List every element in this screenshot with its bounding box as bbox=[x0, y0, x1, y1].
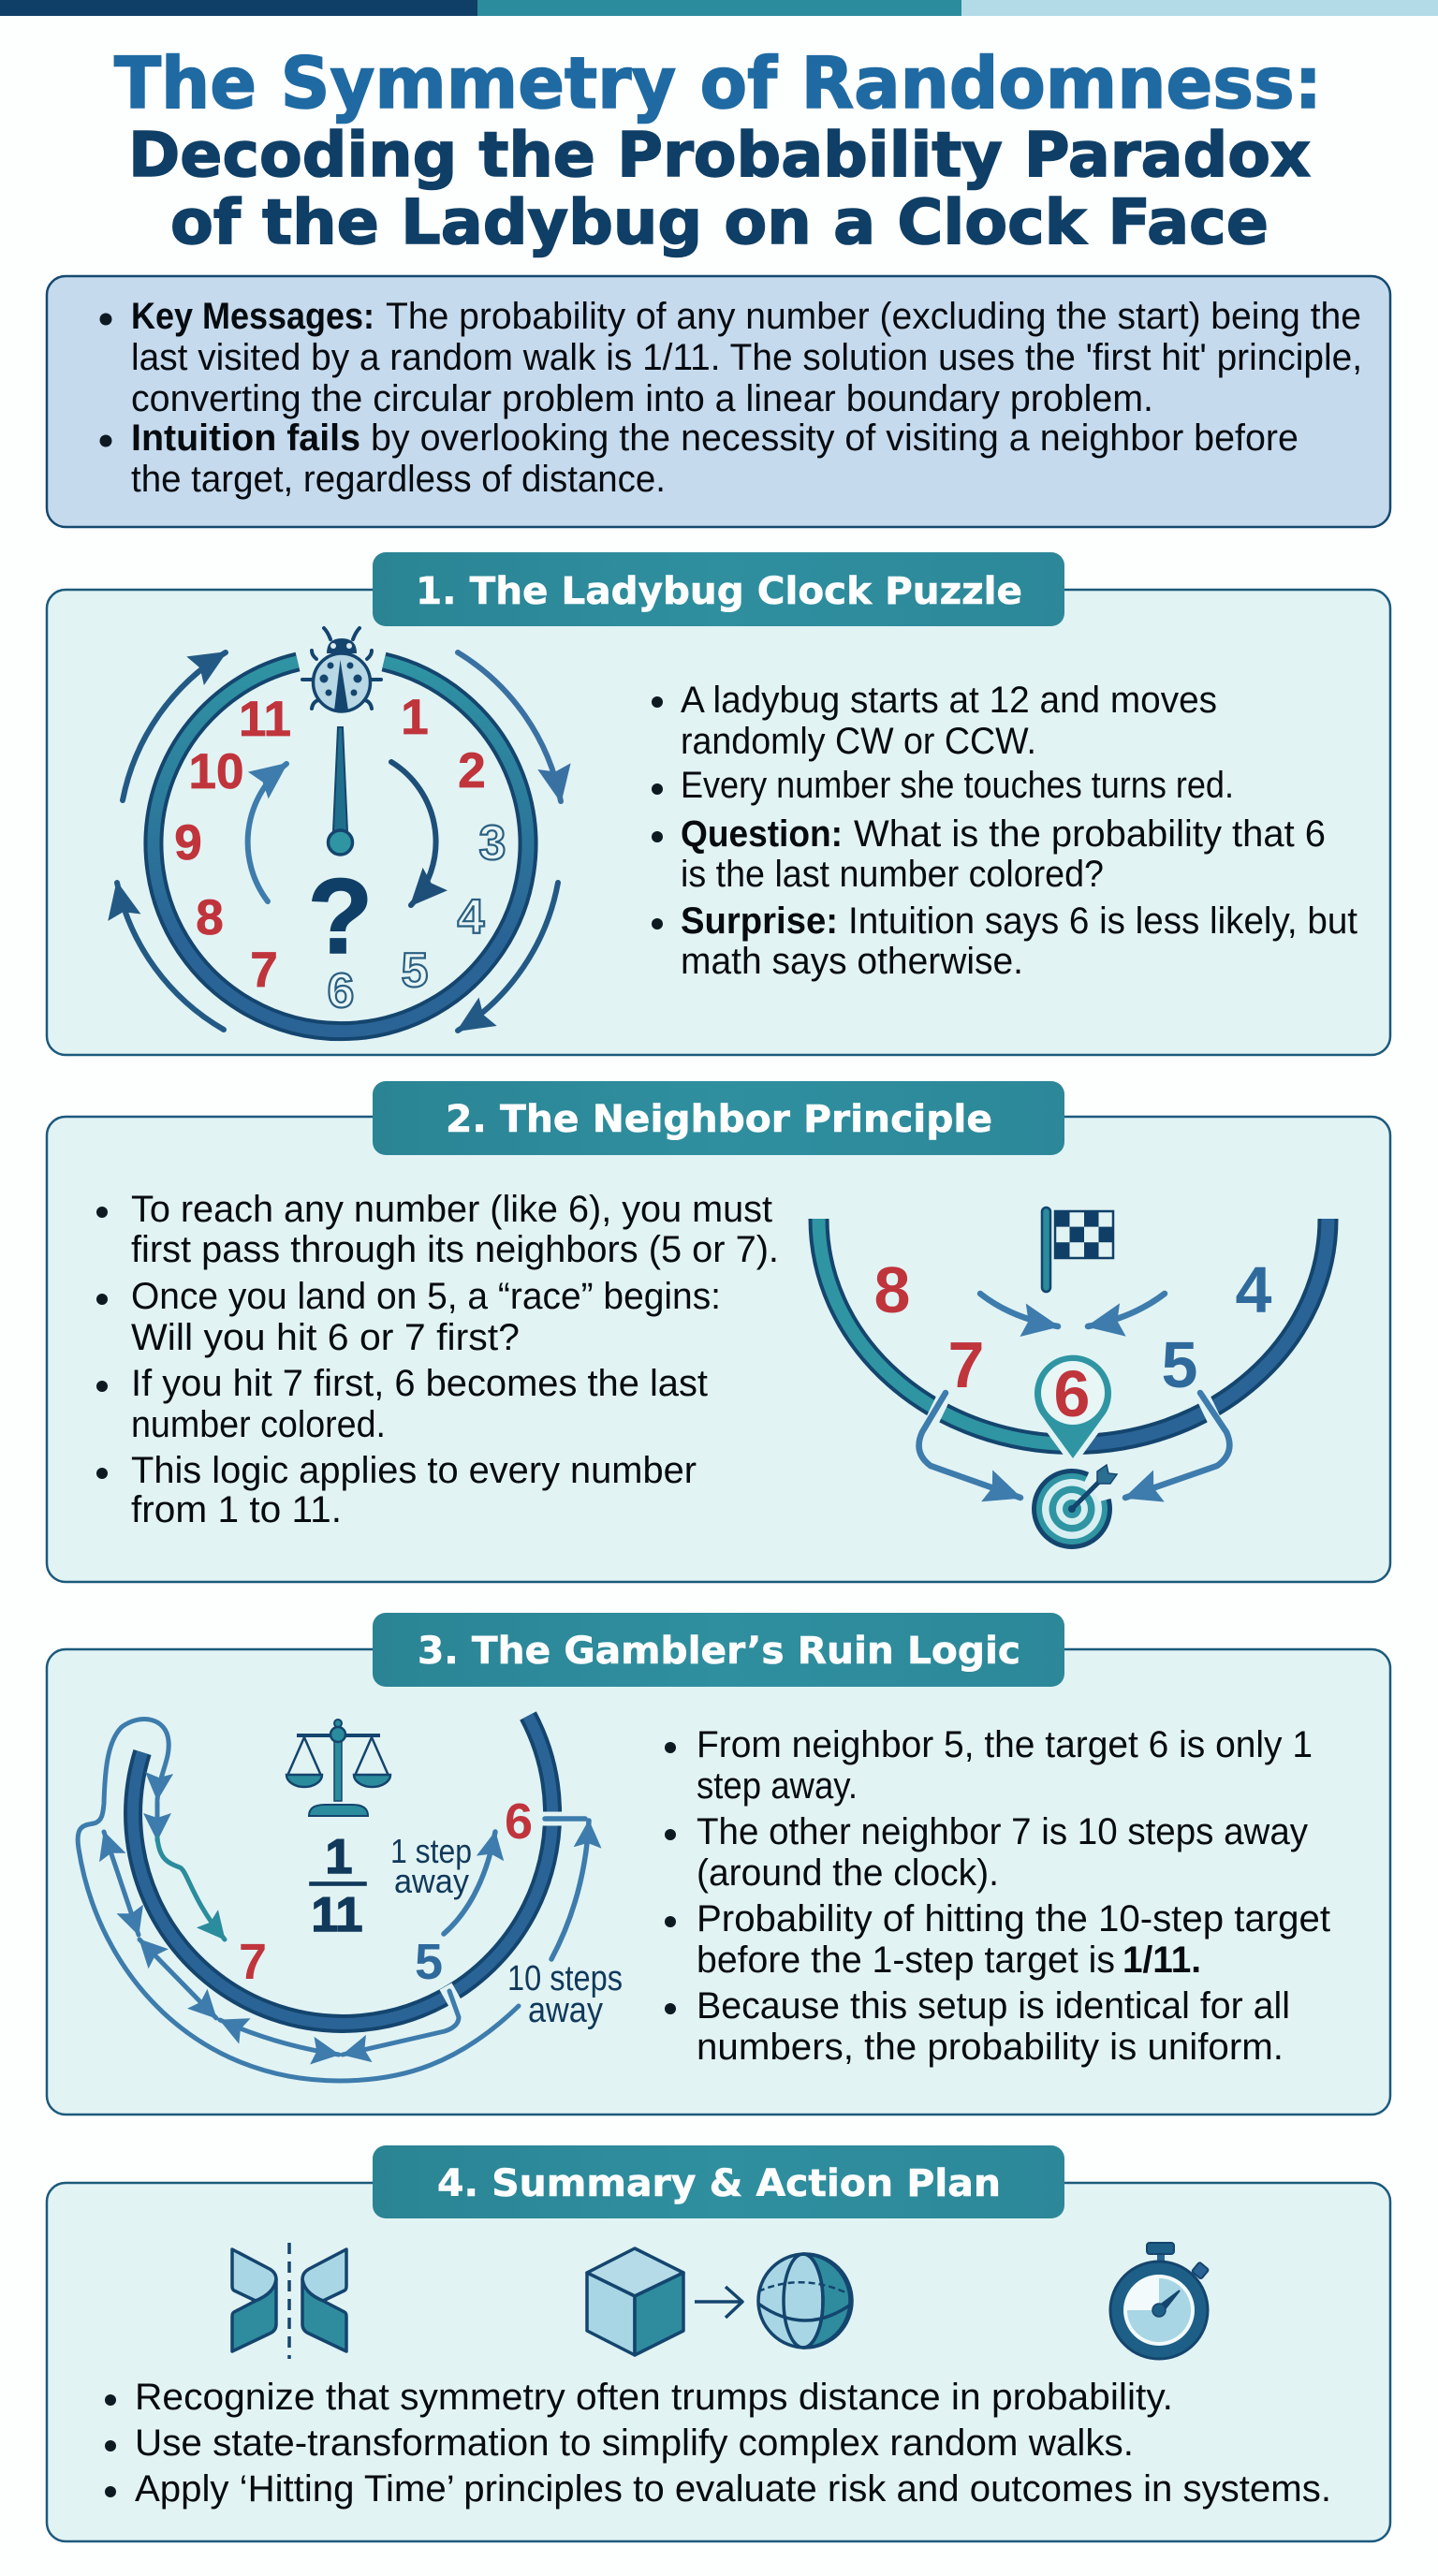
icon: cube to sphere bbox=[587, 2248, 852, 2355]
text block: section 3 bullets: Because this setup is identical for all bbox=[697, 1985, 1290, 2027]
text block: section 1 bullets bbox=[652, 680, 1357, 982]
heading: section 1 bbox=[373, 552, 1064, 626]
top colour bar bbox=[0, 0, 1438, 16]
fraction 1/11: 1 bbox=[326, 1830, 352, 1884]
numbers 8 4 7 5: 7 bbox=[948, 1328, 984, 1401]
panel: key messages bbox=[47, 276, 1390, 527]
red visited numbers: 8 bbox=[196, 890, 224, 945]
heading: section 3: 3. The Gambler’s Ruin Logic bbox=[418, 1630, 1020, 1673]
text block: section 1 bullets: A ladybug starts at 12 and moves bbox=[681, 680, 1217, 721]
text block: section 2 bullets bbox=[96, 1189, 779, 1530]
heading: section 4 bbox=[373, 2145, 1064, 2218]
panel: section 4 background bbox=[47, 2183, 1390, 2541]
connector arrows to target bbox=[919, 1294, 1229, 1498]
location pin with 6 bbox=[1034, 1355, 1111, 1458]
numbers 8 4 7 5 bbox=[874, 1253, 1272, 1401]
fraction 1/11: 11 bbox=[312, 1888, 362, 1942]
text block: section 4 bullets: Recognize that symmetry often trumps distance in probability. bbox=[135, 2377, 1173, 2418]
winding random walk arrows bbox=[78, 1720, 519, 2081]
text block: section 3 bullets: before the 1-step target is bbox=[697, 1939, 1115, 1981]
label: 10 steps away bbox=[507, 1959, 623, 2030]
text block: section 2 bullets: Will you hit 6 or 7 first? bbox=[131, 1317, 520, 1358]
heading: section 2: 2. The Neighbor Principle bbox=[446, 1098, 992, 1141]
text block: section 1 bullets: math says otherwise. bbox=[681, 941, 1023, 982]
panel: key messages: the target, regardless of distance. bbox=[131, 459, 666, 500]
red visited numbers: 10 bbox=[189, 744, 243, 799]
numbers 8 4 7 5: 5 bbox=[1162, 1328, 1197, 1401]
heading: section 3 bbox=[373, 1613, 1064, 1687]
text block: section 2 bullets: first pass through its neighbors (5 or 7). bbox=[131, 1229, 779, 1270]
arc bbox=[818, 1219, 1328, 1444]
label: 1 step away bbox=[390, 1832, 472, 1900]
distance arrows bbox=[444, 1819, 589, 1959]
numbers 8 4 7 5: 8 bbox=[874, 1253, 910, 1326]
icon: target with dart bbox=[1032, 1465, 1117, 1549]
text block: section 1 bullets: Every number she touches turns red. bbox=[681, 765, 1234, 806]
icon: balance scale bbox=[286, 1720, 390, 1816]
label: 10 steps away: 10 steps bbox=[507, 1959, 623, 1998]
panel: key messages: The probability of any number (excluding the start) being the bbox=[386, 296, 1361, 337]
text block: section 3 bullets: 1/11. bbox=[1123, 1939, 1201, 1981]
heading: section 2 bbox=[373, 1081, 1064, 1155]
text block: section 3 bullets: Probability of hitting the 10-step target bbox=[697, 1898, 1330, 1939]
panel: section 2 background bbox=[47, 1117, 1390, 1582]
icon: mirror symmetry bbox=[232, 2243, 346, 2359]
outlined unvisited numbers: 3 bbox=[479, 816, 506, 871]
gambler's ruin diagram bbox=[78, 1716, 623, 2081]
question mark: ? bbox=[308, 857, 373, 976]
numbers 7 6 5: 6 bbox=[505, 1793, 533, 1850]
text block: section 1 bullets: Intuition says 6 is less likely, but bbox=[848, 900, 1357, 942]
inner arrows bbox=[248, 762, 436, 905]
location pin with 6: 6 bbox=[1054, 1357, 1090, 1430]
text block: section 1 bullets: What is the probability that 6 bbox=[854, 813, 1326, 855]
red visited numbers: 11 bbox=[239, 692, 291, 747]
red visited numbers bbox=[174, 690, 486, 998]
text block: section 3 bullets: From neighbor 5, the target 6 is only 1 bbox=[697, 1724, 1313, 1765]
outlined unvisited numbers bbox=[328, 816, 506, 1018]
panel: key messages: Key Messages: bbox=[131, 296, 374, 337]
panel: key messages: Intuition fails bbox=[131, 417, 360, 459]
text block: section 4 bullets bbox=[105, 2377, 1331, 2510]
label: 10 steps away: away bbox=[528, 1991, 603, 2030]
text block: section 3 bullets bbox=[665, 1724, 1330, 2068]
title: of the Ladybug on a Clock Face bbox=[170, 186, 1269, 258]
heading: section 4: 4. Summary & Action Plan bbox=[437, 2162, 1001, 2205]
text block: section 3 bullets: numbers, the probability is uniform. bbox=[697, 2027, 1284, 2068]
fraction 1/11 bbox=[310, 1830, 366, 1942]
red visited numbers: 1 bbox=[401, 690, 429, 745]
panel: key messages: by overlooking the necessity of visiting a neighbor before bbox=[371, 417, 1299, 459]
text block: section 1 bullets: randomly CW or CCW. bbox=[681, 721, 1036, 762]
clock hand bbox=[328, 727, 352, 855]
red visited numbers: 9 bbox=[174, 815, 202, 871]
panel: section 3 background bbox=[47, 1649, 1390, 2115]
numbers 7 6 5: 7 bbox=[239, 1934, 267, 1990]
text block: section 2 bullets: Once you land on 5, a “race” begins: bbox=[131, 1276, 721, 1317]
numbers 7 6 5 bbox=[239, 1793, 533, 1990]
outer arrows bbox=[117, 652, 561, 1031]
text block: section 2 bullets: number colored. bbox=[131, 1404, 386, 1445]
arc bbox=[133, 1716, 565, 2024]
label: 1 step away: 1 step bbox=[390, 1832, 472, 1870]
panel: section 1 background bbox=[47, 590, 1390, 1055]
panel: key messages: converting the circular problem into a linear boundary problem. bbox=[131, 378, 1153, 419]
text block: section 2 bullets: from 1 to 11. bbox=[131, 1489, 342, 1530]
text block: section 4 bullets: Use state-transformation to simplify complex random walks. bbox=[135, 2422, 1134, 2464]
panel: key messages: last visited by a random walk is 1/11. The solution uses the 'first hit' principle, bbox=[131, 337, 1362, 378]
label: 1 step away: away bbox=[394, 1862, 469, 1900]
text block: section 2 bullets: To reach any number (like 6), you must bbox=[131, 1189, 772, 1230]
text block: section 2 bullets: This logic applies to every number bbox=[131, 1450, 697, 1491]
clock ring bbox=[154, 662, 528, 1032]
text block: section 1 bullets: Surprise: bbox=[681, 900, 838, 942]
heading: section 1: 1. The Ladybug Clock Puzzle bbox=[416, 570, 1022, 613]
title: Decoding the Probability Paradox bbox=[128, 119, 1311, 191]
text block: section 3 bullets: step away. bbox=[697, 1765, 858, 1807]
numbers 7 6 5: 5 bbox=[415, 1934, 443, 1990]
icon: ladybug bbox=[302, 628, 381, 711]
red visited numbers: 2 bbox=[458, 743, 486, 798]
outlined unvisited numbers: 6 bbox=[328, 964, 354, 1018]
outlined unvisited numbers: 5 bbox=[402, 944, 428, 998]
outlined unvisited numbers: 4 bbox=[458, 890, 485, 944]
red visited numbers: 7 bbox=[250, 943, 278, 998]
text block: section 2 bullets: If you hit 7 first, 6 becomes the last bbox=[131, 1363, 708, 1404]
neighbor diagram bbox=[818, 1208, 1328, 1549]
text block: section 3 bullets: The other neighbor 7 is 10 steps away bbox=[697, 1811, 1308, 1852]
text block: section 4 bullets: Apply ‘Hitting Time’ principles to evaluate risk and outcomes in systems. bbox=[135, 2468, 1331, 2510]
clock diagram bbox=[117, 628, 561, 1032]
text block: section 3 bullets: (around the clock). bbox=[697, 1852, 999, 1894]
text block: section 1 bullets: is the last number colored? bbox=[681, 854, 1104, 895]
icon: stopwatch bbox=[1110, 2243, 1209, 2359]
title: The Symmetry of Randomness: bbox=[114, 41, 1322, 124]
text block: section 1 bullets: Question: bbox=[681, 813, 843, 855]
title bbox=[114, 41, 1322, 258]
numbers 8 4 7 5: 4 bbox=[1236, 1253, 1272, 1326]
icon: checkered flag bbox=[1042, 1208, 1113, 1292]
